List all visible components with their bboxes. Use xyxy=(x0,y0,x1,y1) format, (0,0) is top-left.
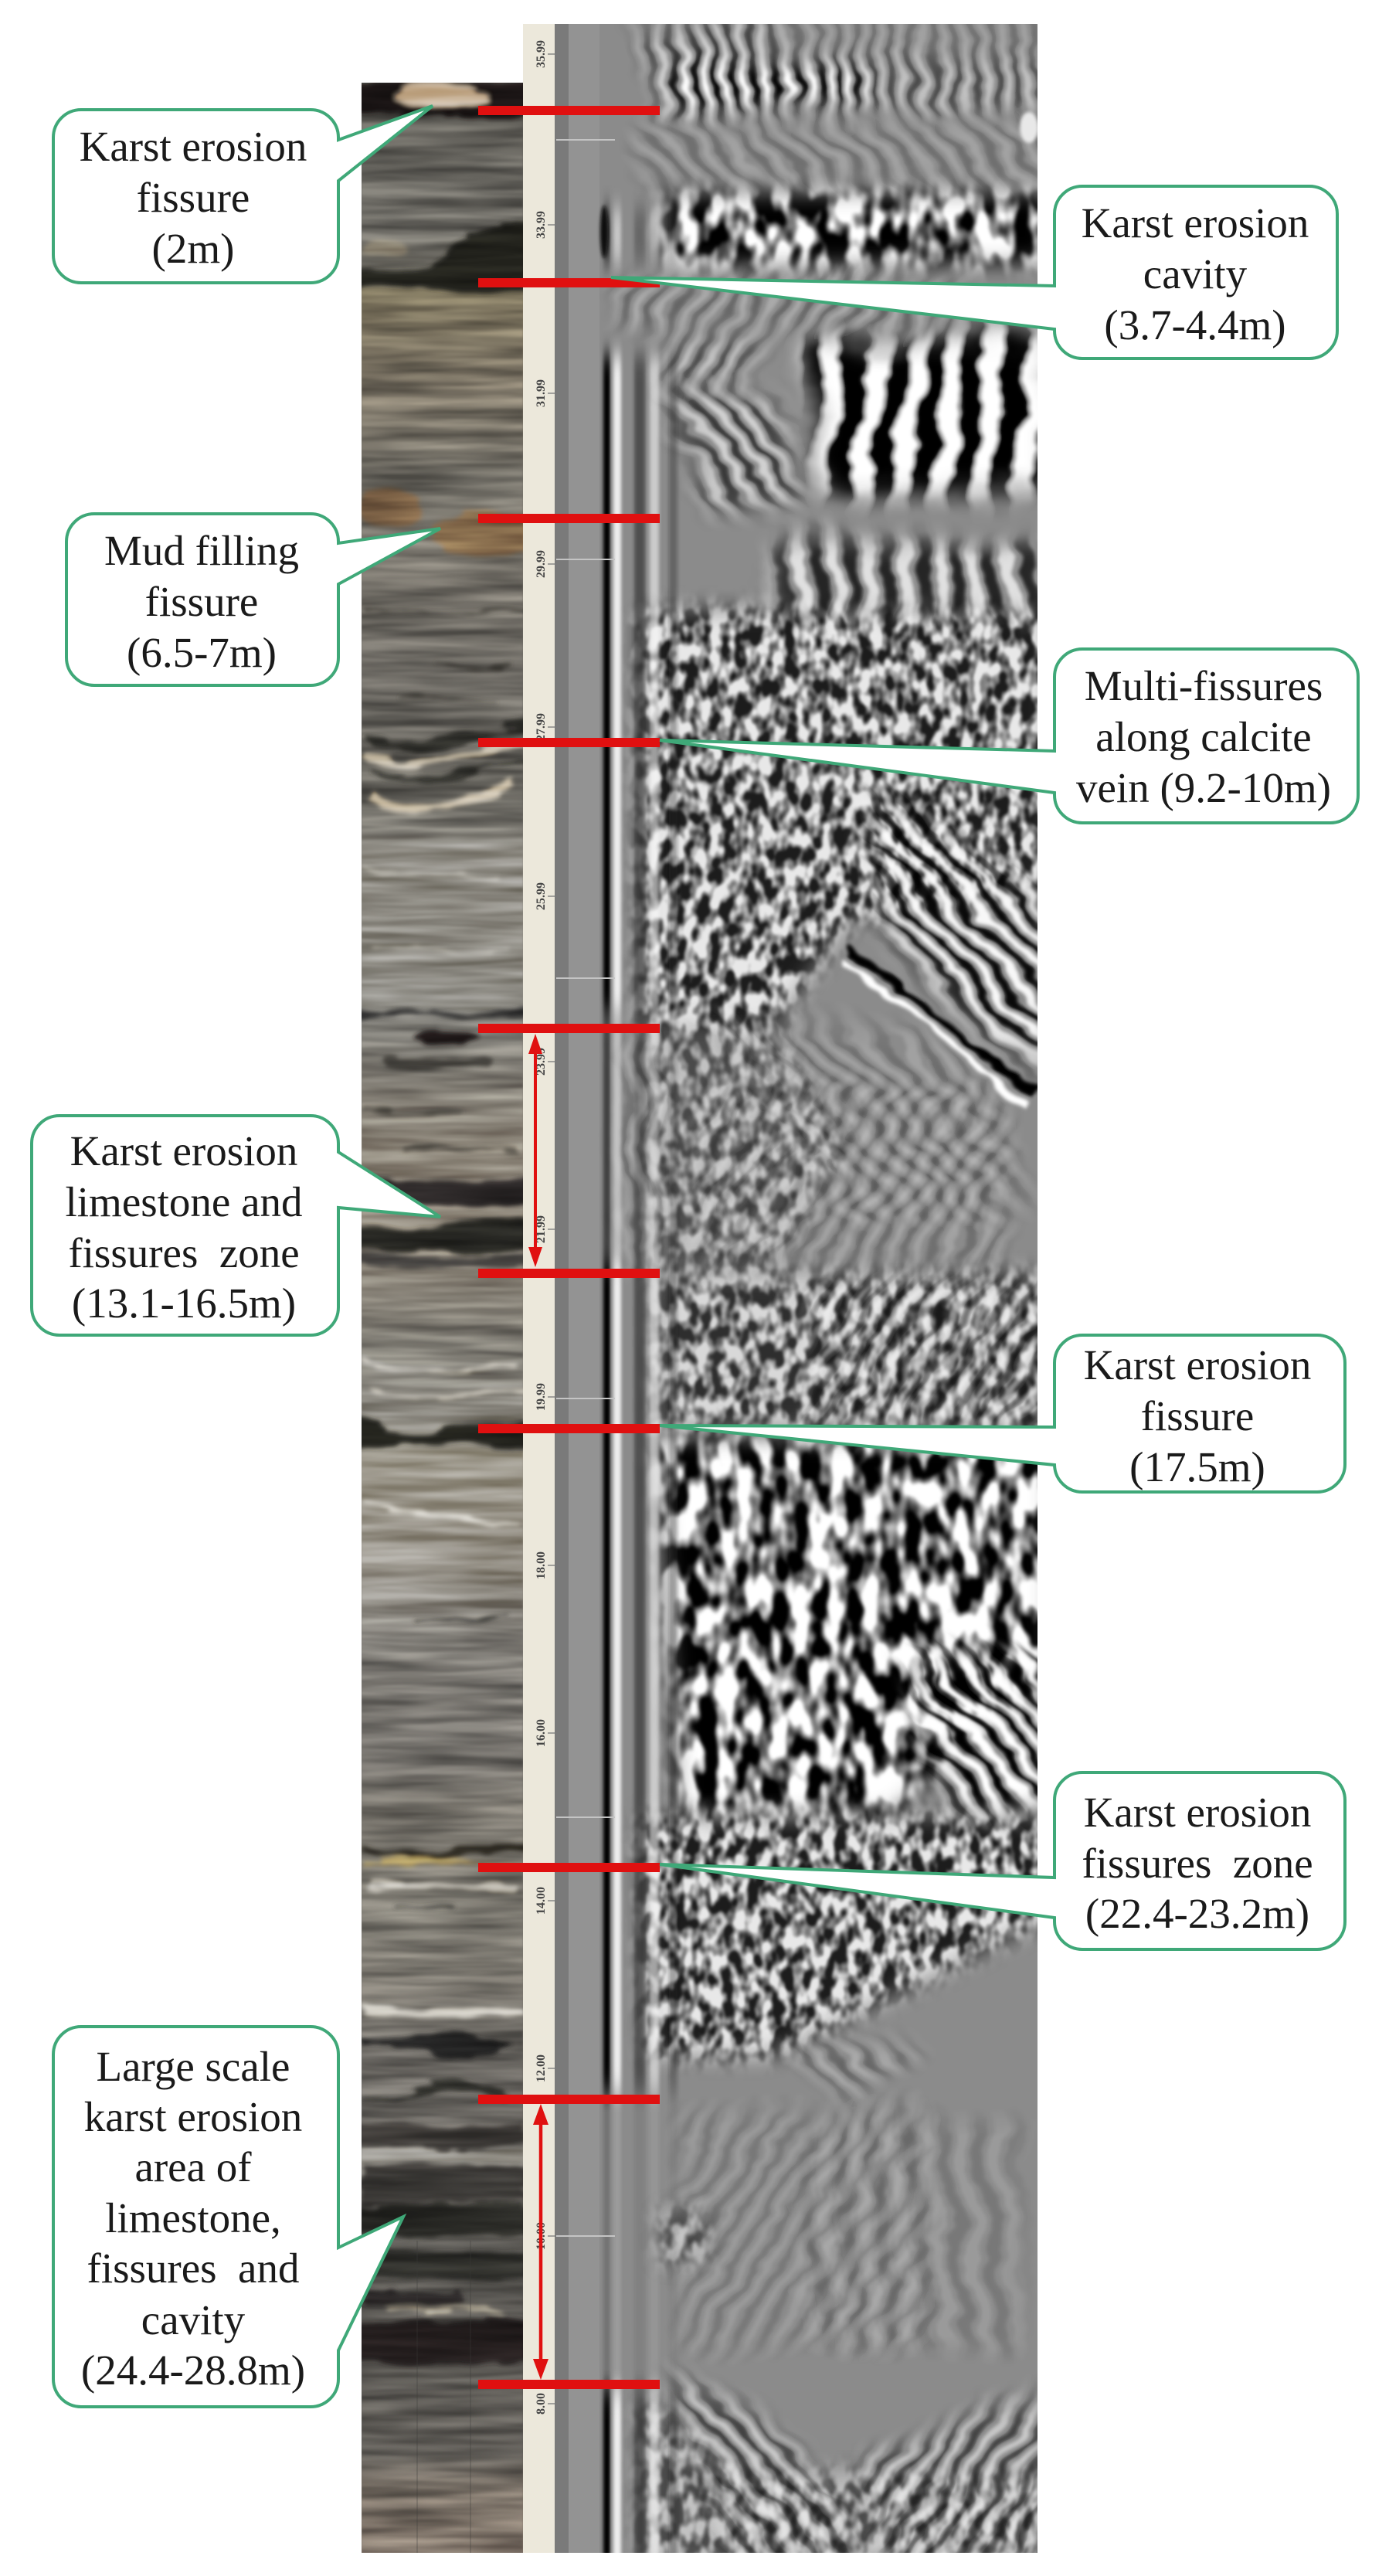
depth ruler: 21.99 xyxy=(535,1215,548,1243)
callout: large scale karst erosion area: (24.4-28.8m) xyxy=(81,2347,305,2394)
callout: karst erosion fissures zone xyxy=(660,1772,1345,1949)
callout: karst erosion fissures zone: Karst erosion xyxy=(1084,1789,1311,1836)
callout: mud filling fissure xyxy=(66,514,440,685)
callout: large scale karst erosion area: cavity xyxy=(141,2296,246,2343)
callout: multi-fissures along calcite vein: vein (9.2-10m) xyxy=(1076,764,1331,811)
callout: karst erosion cavity xyxy=(611,186,1337,359)
callout: mud filling fissure: fissure xyxy=(145,578,258,625)
depth ruler: 18.00 xyxy=(535,1551,548,1579)
callout: karst erosion limestone and fissures zone xyxy=(32,1116,440,1335)
callout: karst erosion fissures zone: fissures zone xyxy=(1082,1840,1313,1887)
callout: mud filling fissure: Mud filling xyxy=(104,527,299,574)
red double arrow: 24.4-28.8m zone xyxy=(533,2104,548,2380)
borehole image column xyxy=(362,83,523,2553)
callout: karst erosion fissure 17.5m xyxy=(660,1335,1345,1492)
callout: karst erosion fissure 17.5m: (17.5m) xyxy=(1129,1443,1265,1490)
callout: karst erosion fissure 2m: (2m) xyxy=(152,225,234,272)
depth ruler: 12.00 xyxy=(535,2054,548,2082)
depth ruler: 33.99 xyxy=(535,211,548,239)
depth ruler: 10.00 xyxy=(535,2222,548,2250)
callout: karst erosion fissure 17.5m: fissure xyxy=(1141,1392,1254,1439)
depth ruler: 31.99 xyxy=(535,379,548,407)
callout: multi-fissures along calcite vein: along calcite xyxy=(1095,713,1312,760)
depth ruler: 19.99 xyxy=(535,1383,548,1411)
callout: large scale karst erosion area: fissures and xyxy=(87,2245,299,2292)
red double arrow: 13.1-16.5m zone xyxy=(528,1034,542,1267)
callout: karst erosion limestone and fissures zone: limestone and xyxy=(65,1178,303,1225)
radar profile xyxy=(541,0,1066,2576)
callout: large scale karst erosion area xyxy=(53,2027,403,2407)
callout: karst erosion fissure 2m: Karst erosion xyxy=(80,123,307,170)
depth ruler xyxy=(523,24,555,2553)
callout: large scale karst erosion area: area of xyxy=(134,2143,252,2190)
depth ruler: 8.00 xyxy=(535,2393,548,2415)
callout: mud filling fissure: (6.5-7m) xyxy=(127,629,277,676)
depth ruler: 27.99 xyxy=(535,713,548,741)
callout: karst erosion limestone and fissures zone: fissures zone xyxy=(68,1229,300,1276)
callout: karst erosion limestone and fissures zone: Karst erosion xyxy=(70,1127,297,1174)
callout: karst erosion cavity: cavity xyxy=(1143,250,1248,297)
depth ruler: 29.99 xyxy=(535,550,548,578)
depth ruler: 16.00 xyxy=(535,1719,548,1747)
callout: karst erosion cavity: (3.7-4.4m) xyxy=(1104,301,1286,348)
callout: karst erosion fissure 2m xyxy=(53,106,433,283)
depth ruler: 25.99 xyxy=(535,882,548,910)
callout: karst erosion limestone and fissures zone: (13.1-16.5m) xyxy=(72,1280,296,1327)
callout: karst erosion fissure 2m: fissure xyxy=(137,174,250,221)
callout: multi-fissures along calcite vein: Multi-fissures xyxy=(1085,662,1323,709)
callout: large scale karst erosion area: karst erosion xyxy=(84,2093,302,2140)
depth ruler: 14.00 xyxy=(535,1887,548,1915)
callout: karst erosion fissures zone: (22.4-23.2m) xyxy=(1085,1890,1309,1937)
callout: large scale karst erosion area: Large scale xyxy=(97,2043,290,2090)
callout: karst erosion fissure 17.5m: Karst erosion xyxy=(1084,1341,1311,1388)
red marker bars xyxy=(478,106,660,2389)
callout: large scale karst erosion area: limestone, xyxy=(105,2194,281,2241)
callout: multi-fissures along calcite vein xyxy=(660,649,1358,823)
callout: karst erosion cavity: Karst erosion xyxy=(1082,199,1309,246)
depth ruler: 35.99 xyxy=(535,40,548,68)
depth ruler: 23.99 xyxy=(535,1048,548,1076)
